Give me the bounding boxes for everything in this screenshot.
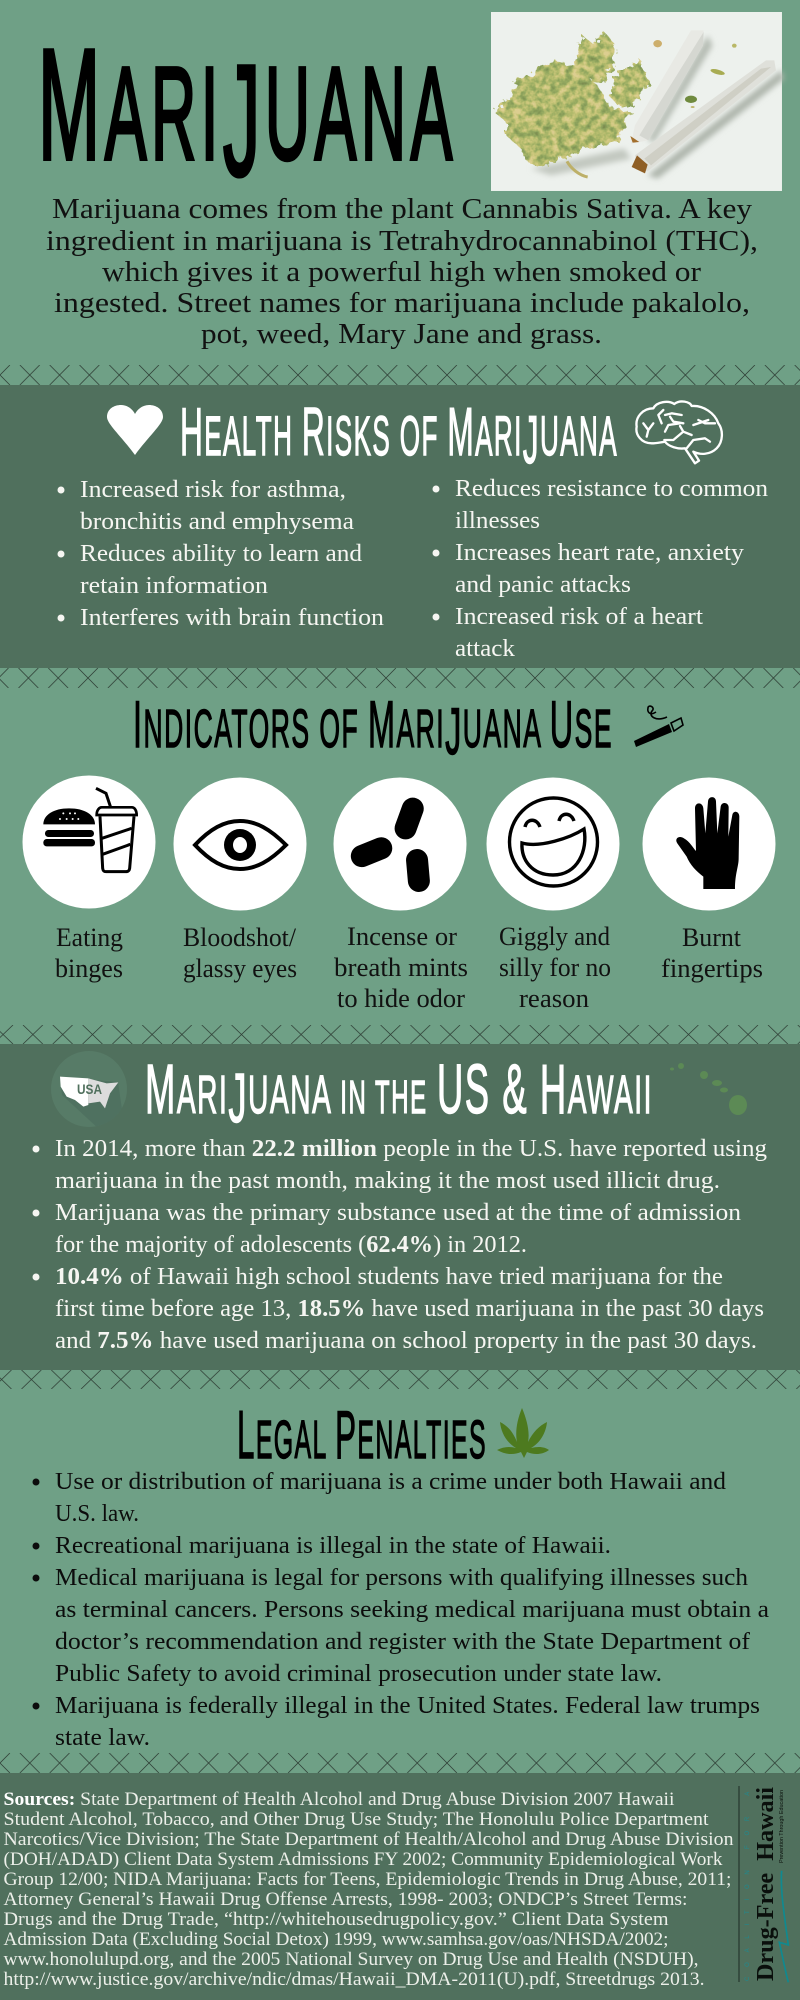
- label: breath mints: [334, 953, 468, 982]
- photo: marijuana buds and joints: [491, 12, 784, 191]
- bullets: right column: Increases heart rate, anxiety: [455, 539, 745, 566]
- heading: indicators: INDICATORS OF MARI: [133, 687, 583, 761]
- bullet list: legal penalties: Marijuana is federally illegal in the United States. Federal law trumps: [55, 1692, 760, 1719]
- label: Bloodshot/: [183, 923, 297, 952]
- bullets: left column: Interferes with brain function: [80, 604, 384, 631]
- bullet list: legal penalties: U.S. law.: [55, 1500, 139, 1527]
- label: reason: [519, 984, 589, 1013]
- icon: USA map badge: [51, 1051, 127, 1130]
- heading: US and Hawaii: UANA: [248, 1065, 331, 1125]
- sources text: [4, 1789, 734, 1990]
- icon: brain: [636, 401, 722, 463]
- sources text: www.honolulupd.org, and the 2005 National Survey on Drug Use and Health (NSDUH),: [4, 1949, 699, 1970]
- joint: [635, 60, 776, 171]
- sources text: Admission Data (Excluding Social Detox) 1999, www.samhsa.gov/oas/NHSDA/2002;: [4, 1929, 669, 1950]
- sources text: (DOH/ADAD) Client Data System Admissions FY 2002; Community Epidemiological Work: [4, 1849, 723, 1870]
- bullet list: statistics: and 7.5% have used marijuana on school property in the past 30 days.: [55, 1327, 757, 1354]
- bullets: left column: [58, 476, 384, 631]
- logo: Drug-Free Hawaii: Drug-Free Hawaii: [753, 1787, 779, 1981]
- sources text: Group 12/00; NIDA Marijuana: Facts for Teens, Epidemiologic Trends in Drug Abuse, 2011;: [4, 1869, 732, 1890]
- intro paragraph: Marijuana comes from the plant Cannabis Sativa. A key: [52, 194, 752, 225]
- bullets: right column: Increased risk of a heart: [455, 603, 703, 630]
- icon: Hawaiian islands: [670, 1063, 747, 1115]
- label: fingertips: [661, 954, 763, 983]
- indicator: incense or breath mints: [334, 778, 468, 1013]
- bullets: left column: retain information: [80, 572, 268, 599]
- title: MARI: [38, 17, 355, 193]
- icon: hand: [676, 797, 739, 889]
- heading: health risks: HEALTH RISKS OF MARI: [180, 394, 578, 470]
- panel: sources: [0, 1773, 800, 2000]
- indicator: giggly: [486, 778, 620, 1013]
- bullets: left column: Increased risk for asthma,: [80, 476, 346, 503]
- label: Giggly and: [499, 922, 610, 951]
- bullets: right column: Reduces resistance to common: [455, 475, 768, 502]
- joint: [631, 30, 704, 144]
- bullet list: legal penalties: Public Safety to avoid criminal prosecution under state law.: [55, 1660, 662, 1687]
- bullet list: legal penalties: Medical marijuana is legal for persons with qualifying illnesses such: [55, 1564, 748, 1591]
- bullet list: legal penalties: state law.: [55, 1724, 150, 1751]
- bullet list: legal penalties: Use or distribution of marijuana is a crime under both Hawaii and: [55, 1468, 726, 1495]
- label: Incense or: [347, 922, 457, 951]
- bullet list: statistics: 10.4% of Hawaii high school students have tried marijuana for the: [55, 1263, 723, 1290]
- sources text: Student Alcohol, Tobacco, and Other Drug Use Study; The Honolulu Police Department: [4, 1809, 709, 1830]
- heading: US and Hawaii: MARI: [145, 1050, 276, 1128]
- bullets: left column: Reduces ability to learn and: [80, 540, 362, 567]
- panel: US and Hawaii: [0, 1044, 800, 1370]
- indicator: burnt fingertips: [642, 778, 776, 983]
- sources text: Narcotics/Vice Division; The State Department of Health/Alcohol and Drug Abuse Division: [4, 1829, 734, 1850]
- indicator: bloodshot eyes: [174, 778, 306, 983]
- panel: health risks: [0, 385, 800, 668]
- label: Eating: [56, 923, 123, 952]
- bullet list: statistics: for the majority of adolescents (62.4%) in 2012.: [55, 1231, 527, 1258]
- bullet list: statistics: [32, 1135, 767, 1354]
- bullet list: statistics: marijuana in the past month, making it the most used illicit drug.: [55, 1167, 720, 1194]
- bullet list: statistics: Marijuana was the primary substance used at the time of admission: [55, 1199, 741, 1226]
- heading: indicators: UANA: [463, 699, 541, 759]
- icon: laughing face: [510, 798, 598, 886]
- bullets: left column: bronchitis and emphysema: [80, 508, 354, 535]
- sources text: Drugs and the Drug Trade, “http://whitehousedrugpolicy.gov.” Client Data System: [4, 1909, 669, 1930]
- heading: health risks: J: [523, 402, 540, 478]
- bullets: right column: illnesses: [455, 507, 540, 534]
- icon: eye: [195, 821, 286, 869]
- heading: legal penalties: LEGAL PENALTIES: [237, 1397, 487, 1473]
- label: binges: [55, 954, 123, 983]
- bullets: right column: [432, 475, 768, 662]
- icon: USA map badge: USA: [77, 1081, 102, 1097]
- logo: Drug-Free Hawaii: Prevention Through Education: [779, 1790, 785, 1863]
- panel: health risks: UANA: [540, 404, 618, 467]
- intro paragraph: ingredient in marijuana is Tetrahydrocannabinol (THC),: [46, 226, 758, 257]
- heading: US and Hawaii: IN THE US & HAWAII: [340, 1050, 732, 1128]
- bullet list: legal penalties: as terminal cancers. Persons seeking medical marijuana must obtain a: [55, 1596, 769, 1623]
- bullet list: legal penalties: doctor’s recommendation and register with the State Department of: [55, 1628, 751, 1655]
- intro paragraph: pot, weed, Mary Jane and grass.: [201, 319, 602, 350]
- icon: cannabis leaf: [497, 1408, 549, 1458]
- sources text: http://www.justice.gov/archive/ndic/dmas/Hawaii_DMA-2011(U).pdf, Streetdrugs 2013.: [4, 1969, 705, 1990]
- text: UANA: [265, 40, 457, 187]
- label: silly for no: [499, 953, 611, 982]
- intro paragraph: which gives it a powerful high when smoked or: [102, 257, 702, 288]
- logo: Drug-Free Hawaii: [738, 1782, 788, 1982]
- icon: pills: [347, 795, 431, 893]
- title: J: [223, 33, 265, 209]
- icon: cigarette: [634, 706, 683, 747]
- icon: burger and drink: [43, 788, 137, 872]
- bullet list: statistics: In 2014, more than 22.2 million people in the U.S. have reported using: [55, 1135, 767, 1162]
- intro paragraph: ingested. Street names for marijuana include pakalolo,: [54, 288, 750, 319]
- bullets: right column: attack: [455, 635, 516, 662]
- icon: heart: [107, 405, 163, 455]
- intro paragraph: [46, 194, 758, 350]
- logo: Drug-Free Hawaii: COALITION FOR A: [745, 1782, 751, 1981]
- heading: indicators: J: [445, 694, 463, 768]
- sources text: Attorney General’s Hawaii Drug Offense Arrests, 1998- 2003; ONDCP’s Street Terms:: [4, 1889, 688, 1910]
- sources text: Sources: State Department of Health Alcohol and Drug Abuse Division 2007 Hawaii: [4, 1789, 674, 1810]
- label: glassy eyes: [183, 954, 297, 983]
- heading: indicators: USE: [550, 687, 653, 761]
- label: Burnt: [682, 923, 742, 952]
- bullet list: statistics: first time before age 13, 18.5% have used marijuana in the past 30 days: [55, 1295, 764, 1322]
- bullet list: legal penalties: Recreational marijuana is illegal in the state of Hawaii.: [55, 1532, 611, 1559]
- label: to hide odor: [337, 984, 465, 1013]
- bullet list: legal penalties: [32, 1468, 769, 1751]
- indicator: eating binges: [22, 776, 156, 983]
- heading: US and Hawaii: J: [228, 1059, 248, 1137]
- bullets: right column: and panic attacks: [455, 571, 631, 598]
